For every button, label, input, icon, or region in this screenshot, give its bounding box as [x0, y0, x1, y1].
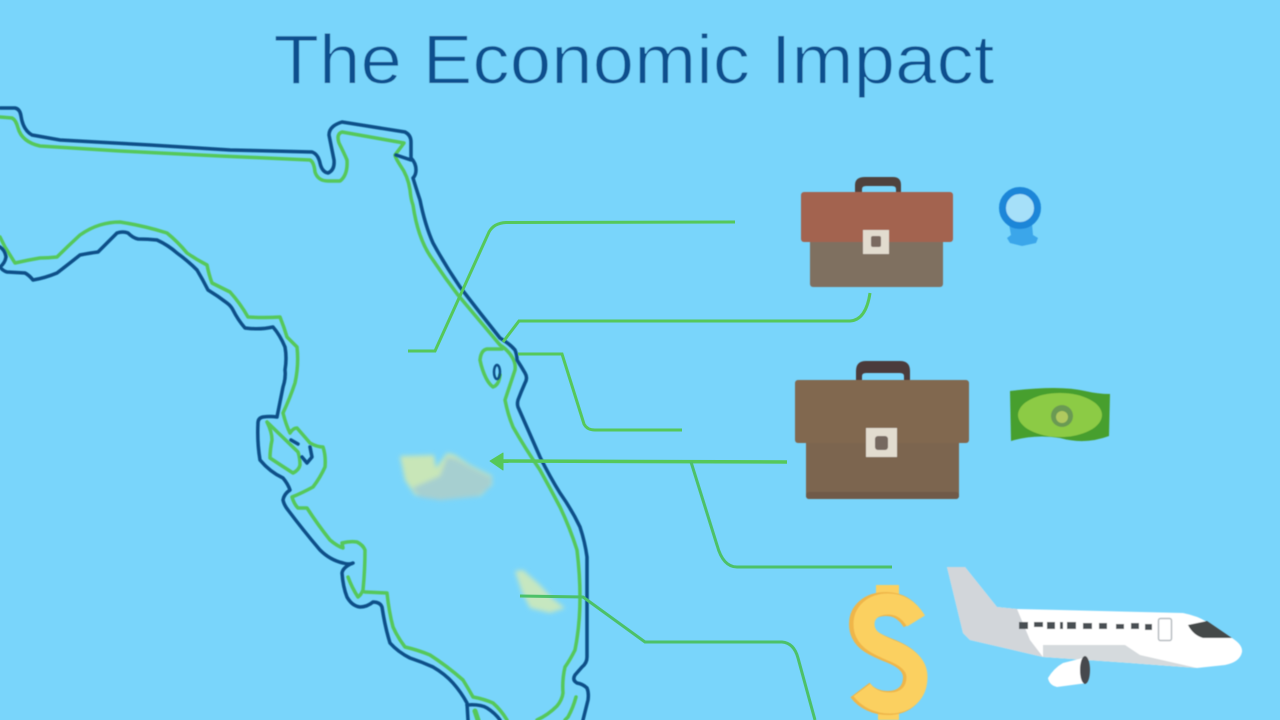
icon: banknote — [1010, 388, 1110, 441]
leader line 3 — [518, 354, 682, 430]
arrow — [490, 453, 787, 470]
icon: lower briefcase — [795, 361, 969, 499]
icon: airplane — [947, 567, 1242, 687]
map: Florida outline, navy — [0, 108, 588, 720]
leader line 2 — [503, 293, 870, 342]
leader line 5 — [520, 596, 815, 720]
map: county blobs — [400, 453, 565, 613]
leader line 4 — [691, 462, 892, 567]
leader line 1 — [408, 222, 735, 351]
title: The Economic Impact — [274, 20, 994, 98]
icon: dollar sign — [860, 585, 917, 720]
map: Florida outline, green — [0, 117, 580, 720]
icon: upper briefcase — [801, 177, 953, 287]
icon: ribbon badge — [1002, 190, 1038, 246]
